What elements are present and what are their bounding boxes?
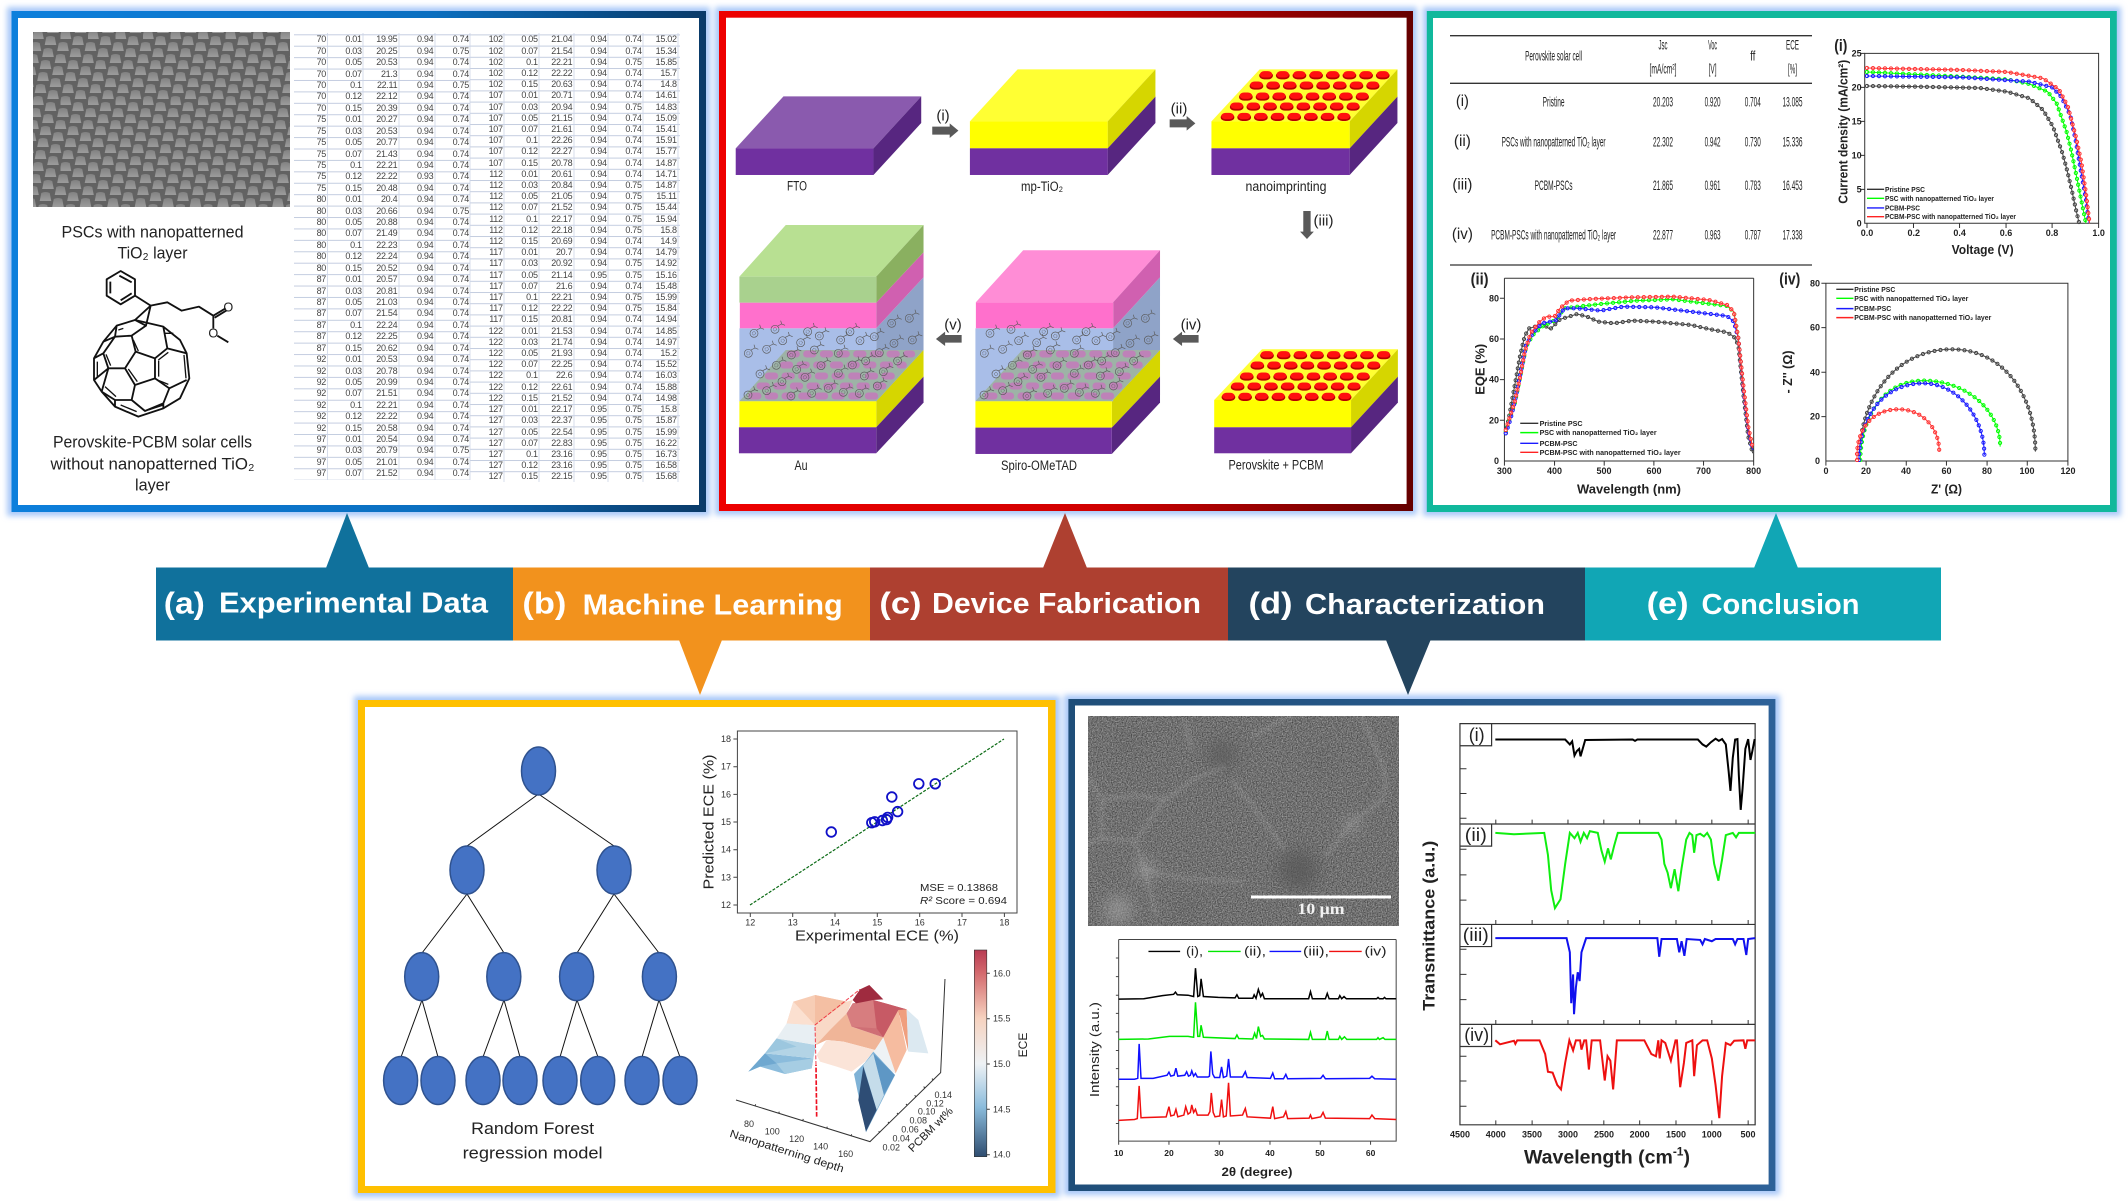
chart: FTIR transmittance spectra: -1	[1673, 1144, 1684, 1158]
chart: EQE spectra: EQE (%)	[1472, 344, 1488, 395]
panel: machine learning	[358, 700, 1056, 1193]
table: experimental data values: 0.94 0.94 0.94 0.94 0.94 0.94 0.94 0.94 0.94 0.94 0.94 0.94 0.93 0.94 0.94 0.94 0.94 0.94 0.94 0.94 0.94 0.94 0.94 0.94 0.94 0.94 0.94 0.94 0.94 0.94 0.94 0.94 0.94 0.94 0.94 0.94 0.94 0.94 0.94	[417, 34, 433, 478]
chart: predicted vs experimental ECE: 18	[999, 918, 1009, 928]
chart: FTIR transmittance spectra: Transmittance (a.u.)	[1420, 841, 1438, 1011]
chart: 3D ECE response surface: 120	[789, 1134, 804, 1144]
panel: device fabrication	[719, 11, 1413, 511]
chart: predicted vs experimental ECE: 16	[721, 789, 731, 799]
banner: characterization: Characterization	[1305, 589, 1545, 621]
step labels: (iv)	[1181, 316, 1201, 334]
chart: EQE spectra: 700	[1696, 466, 1711, 476]
chart: EQE spectra: 80	[1489, 293, 1499, 303]
scale bar: 10 micrometres	[1251, 896, 1391, 918]
chart: EQE spectra: PSC with nanopatterned TiO₂ layer	[1540, 428, 1657, 437]
chart: FTIR transmittance spectra: (ii)	[1465, 825, 1487, 845]
chart: J-V curves: 0.0	[1861, 228, 1873, 238]
legend: ECE colorbar: 14.5	[993, 1104, 1011, 1114]
block: nanoimprinting	[1211, 69, 1397, 175]
chart: 3D ECE response surface: 0.08	[910, 1115, 927, 1125]
chart: predicted vs experimental ECE: 13	[721, 872, 731, 882]
chart: EQE spectra: PCBM-PSC	[1540, 439, 1578, 448]
table: device performance: 0.787	[1745, 227, 1761, 243]
banner: device fabrication: Device Fabrication	[932, 588, 1201, 620]
chart: Nyquist plot: 0	[1823, 466, 1829, 476]
block: mp-TiO2	[970, 69, 1155, 175]
table: device performance: Jsc	[1658, 36, 1668, 52]
text: random forest regression model: Random Forest	[471, 1119, 594, 1138]
text: PSCs with nanopatterned TiO2 layer: TiO₂ layer	[118, 244, 188, 262]
banner: machine learning	[513, 568, 870, 640]
table: device performance: 0.783	[1745, 177, 1761, 193]
chart: FTIR transmittance spectra: 4500	[1450, 1130, 1470, 1140]
table: device performance: ECE	[1786, 36, 1799, 52]
table: device performance: 0.730	[1745, 133, 1761, 149]
chart: FTIR transmittance spectra: 1500	[1666, 1130, 1686, 1140]
chart: 3D ECE response surface: PCBM wt%	[906, 1105, 956, 1155]
arrow: step iii	[1300, 211, 1314, 239]
banner: characterization	[1228, 568, 1585, 640]
table: experimental data values: 0.74 0.74 0.75 0.74 0.74 0.74 0.75 0.74 0.74 0.74 0.74 0.74 0.74 0.75 0.75 0.75 0.75 0.75 0.74 0.74 0.75 0.75 0.74 0.75 0.75 0.74 0.74 0.74 0.74 0.74 0.74 0.74 0.74 0.75 0.75 0.75 0.75 0.75 0.75 0.75	[625, 34, 642, 481]
block: perovskite and PCBM	[1214, 349, 1398, 453]
text: Perovskite-PCBM solar cells without nanopatterned TiO2 layer: layer	[135, 476, 170, 494]
arrow: step ii	[1170, 116, 1195, 131]
banner arrow: experimental data up	[326, 513, 369, 568]
chart: predicted vs experimental ECE: 15	[872, 918, 882, 928]
banner: conclusion: (e)	[1647, 586, 1689, 620]
chart: XRD patterns: (ii),	[1244, 944, 1266, 958]
layer labels	[787, 178, 1326, 473]
table: experimental data values: 0.74 0.75 0.74 0.74 0.75 0.74 0.74 0.74 0.74 0.74 0.74 0.74 0.74 0.74 0.74 0.75 0.74 0.74 0.74 0.74 0.74 0.74 0.74 0.74 0.74 0.74 0.74 0.74 0.74 0.74 0.74 0.74 0.74 0.74 0.74 0.74 0.75 0.74 0.74	[453, 34, 469, 478]
table: device performance	[1450, 36, 1812, 265]
chart: XRD patterns: Intensity (a.u.)	[1088, 1002, 1102, 1097]
table: device performance: 22.877	[1653, 227, 1673, 243]
table: experimental data values: 70 70 70 70 70 70 70 75 75 75 75 75 75 75 80 80 80 80 80 80 80 87 87 87 87 87 87 87 92 92 92 92 92 92 92 97 97 97 97	[317, 34, 326, 478]
table: device performance: PCBM-PSCs with nanopatterned TiO₂ layer	[1491, 227, 1616, 243]
chart: 3D ECE response surface: 0.04	[893, 1133, 910, 1143]
banner arrow: conclusion up	[1754, 513, 1798, 568]
table: device performance: 0.942	[1705, 133, 1721, 149]
table: device performance: 0.920	[1705, 93, 1721, 109]
chart: XRD patterns: (iii),	[1303, 944, 1329, 958]
banner: device fabrication: (c)	[879, 586, 921, 620]
banner: experimental data: (a)	[164, 586, 205, 620]
chart: 3D ECE response surface: 140	[813, 1142, 828, 1152]
chart: EQE spectra: 800	[1746, 466, 1761, 476]
layer labels: Perovskite + PCBM	[1228, 458, 1324, 472]
chart: J-V curves: (i)	[1834, 36, 1847, 55]
chart: FTIR transmittance spectra: (iv)	[1464, 1025, 1489, 1045]
chart: EQE spectra: 500	[1596, 466, 1612, 476]
chart: EQE spectra	[1471, 270, 1761, 496]
chart: EQE spectra: 600	[1646, 466, 1662, 476]
chart: 3D ECE response surface: 0.10	[918, 1106, 935, 1116]
table: device performance: [V]	[1709, 60, 1717, 76]
table: device performance: (iii)	[1452, 176, 1472, 194]
block: Spiro-OMeTAD stack	[975, 250, 1160, 454]
icon: PCBM fullerene molecule: O	[208, 326, 218, 340]
chart: FTIR transmittance spectra: (i)	[1469, 725, 1485, 745]
chart: FTIR transmittance spectra: Wavelength (cm	[1524, 1146, 1673, 1168]
panel: characterization	[1068, 699, 1775, 1191]
chart: J-V curves: 0.6	[2000, 228, 2012, 238]
table: experimental data values: 0.94 0.94 0.94 0.94 0.94 0.94 0.94 0.94 0.94 0.94 0.94 0.94 0.94 0.94 0.94 0.94 0.94 0.94 0.94 0.94 0.94 0.95 0.94 0.94 0.94 0.94 0.94 0.94 0.94 0.94 0.94 0.94 0.94 0.95 0.95 0.95 0.95 0.95 0.95 0.95	[590, 34, 607, 481]
banner: experimental data	[156, 568, 513, 640]
table: device performance: 20.203	[1653, 93, 1673, 109]
legend: ECE colorbar: 15.0	[993, 1059, 1011, 1069]
chart: 3D ECE response surface: 80	[744, 1119, 754, 1129]
image: SEM film micrograph	[1088, 715, 1399, 926]
chart: XRD patterns: 30	[1214, 1148, 1224, 1158]
text: Perovskite-PCBM solar cells without nanopatterned TiO2 layer: Perovskite-PCBM solar cells	[53, 432, 252, 452]
banner: machine learning: (b)	[522, 586, 566, 620]
chart: 3D ECE response surface: 0.14	[935, 1090, 952, 1100]
table: experimental data values: 0.05 0.07 0.1 0.12 0.15 0.01 0.03 0.05 0.07 0.1 0.12 0.15 0.01 0.03 0.05 0.07 0.1 0.12 0.15 0.01 0.03 0.05 0.07 0.1 0.12 0.15 0.01 0.03 0.05 0.07 0.1 0.12 0.15 0.01 0.03 0.05 0.07 0.1 0.12 0.15	[521, 34, 538, 481]
banner arrow: device fabrication up	[1043, 513, 1087, 568]
table: device performance: 0.963	[1705, 227, 1721, 243]
table: device performance: 22.302	[1653, 133, 1673, 149]
chart: J-V curves: Pristine PSC	[1885, 185, 1926, 194]
layer labels: mp-TiO₂	[1021, 179, 1063, 194]
chart: Nyquist plot: Z' (Ω)	[1931, 482, 1962, 496]
chart: J-V curves	[1834, 36, 2105, 257]
table: device performance: PSCs with nanopatterned TiO₂ layer	[1502, 133, 1606, 149]
table: experimental data values: 102 102 102 102 102 107 107 107 107 107 107 107 112 112 112 112 112 112 112 117 117 117 117 117 117 117 122 122 122 122 122 122 122 127 127 127 127 127 127 127	[489, 34, 503, 481]
table: device performance: (i)	[1456, 93, 1469, 110]
banner arrow: characterization down	[1386, 640, 1431, 695]
legend: ECE colorbar	[974, 950, 1030, 1160]
chart: Nyquist plot: 120	[2060, 466, 2076, 476]
table: device performance: 17.338	[1782, 227, 1803, 243]
arrow: step iv	[1173, 332, 1199, 346]
chart: XRD patterns: 10	[1114, 1148, 1124, 1158]
chart: XRD patterns: (iv)	[1364, 944, 1386, 958]
table: device performance: 0.961	[1705, 177, 1721, 193]
banner: characterization: (d)	[1248, 586, 1292, 620]
text: PSCs with nanopatterned TiO2 layer: PSCs with nanopatterned	[62, 222, 244, 242]
chart: J-V curves: PCBM-PSC	[1885, 204, 1920, 212]
text: Perovskite-PCBM solar cells without nanopatterned TiO2 layer	[50, 432, 255, 494]
block: FTO	[736, 96, 921, 175]
table: experimental data values: 15.02 15.34 15.85 15.7 14.8 14.61 14.83 15.09 15.41 15.91 15.77 14.87 14.71 14.87 15.11 15.44 15.94 15.8 14.9 14.79 14.92 15.16 15.48 15.99 15.84 14.94 14.85 14.97 15.2 15.52 16.03 15.88 14.98 15.8 15.87 15.99 16.22 16.73 16.58 15.68	[656, 34, 677, 481]
banner: experimental data: Experimental Data	[219, 588, 489, 620]
chart: XRD patterns: 50	[1315, 1148, 1325, 1158]
chart: Nyquist plot: PCBM-PSC with nanopatterned TiO₂ layer	[1854, 313, 1991, 322]
chart: EQE spectra: PCBM-PSC with nanopatterned TiO₂ layer	[1540, 448, 1681, 457]
chart: J-V curves: 0	[1857, 218, 1862, 228]
chart: predicted vs experimental ECE: 16	[915, 918, 925, 928]
chart: FTIR transmittance spectra: 2500	[1594, 1130, 1614, 1140]
panel: conclusion results	[1427, 11, 2117, 512]
chart: J-V curves: Current density (mA/cm²)	[1836, 60, 1850, 204]
table: experimental data values: 19.95 20.25 20.53 21.3 22.11 22.12 20.39 20.27 20.53 20.77 21.43 22.21 22.22 20.48 20.4 20.66 20.88 21.49 22.23 22.24 20.52 20.57 20.81 21.03 21.54 22.24 22.25 20.62 20.53 20.78 20.99 21.51 22.21 22.22 20.58 20.54 20.79 21.01 21.52	[376, 34, 397, 478]
table: experimental data values: 0.01 0.03 0.05 0.07 0.1 0.12 0.15 0.01 0.03 0.05 0.07 0.1 0.12 0.15 0.01 0.03 0.05 0.07 0.1 0.12 0.15 0.01 0.03 0.05 0.07 0.1 0.12 0.15 0.01 0.03 0.05 0.07 0.1 0.12 0.15 0.01 0.03 0.05 0.07	[345, 34, 362, 478]
chart: FTIR transmittance spectra: )	[1683, 1146, 1690, 1168]
arrow: step v	[936, 332, 962, 346]
chart: 3D ECE response surface: 160	[838, 1149, 853, 1159]
chart: Nyquist plot: 60	[1941, 466, 1952, 476]
table: device performance: 16.453	[1782, 177, 1803, 193]
chart: J-V curves: 25	[1852, 48, 1862, 58]
chart: FTIR transmittance spectra: (iii)	[1463, 925, 1489, 945]
chart: 3D ECE response surface: 0.02	[883, 1142, 900, 1152]
chart: J-V curves: PCBM-PSC with nanopatterned TiO₂ layer	[1885, 212, 2016, 221]
table: device performance: (iv)	[1452, 226, 1473, 243]
chart: FTIR transmittance spectra: 4000	[1486, 1130, 1506, 1140]
table: device performance: (ii)	[1454, 133, 1471, 150]
chart: XRD patterns: 60	[1366, 1148, 1376, 1158]
legend: ECE colorbar: 16.0	[993, 968, 1011, 978]
step labels: (ii)	[1171, 100, 1187, 118]
chart: 3D ECE response surface: 0.12	[926, 1098, 944, 1108]
table: experimental data values: 21.04 21.54 22.21 22.22 20.63 20.71 20.94 21.15 21.61 22.26 22.27 20.78 20.61 20.84 21.05 21.52 22.17 22.18 20.69 20.7 20.92 21.14 21.6 22.21 22.22 20.81 21.53 21.74 21.93 22.25 22.6 22.61 21.52 22.17 22.37 22.54 22.83 23.16 23.16 22.15	[551, 34, 572, 481]
chart: predicted vs experimental ECE: 18	[721, 734, 731, 744]
chart: J-V curves: 5	[1857, 184, 1862, 194]
text: PSCs with nanopatterned TiO2 layer	[62, 222, 244, 262]
chart: predicted vs experimental ECE: Predicted ECE (%)	[700, 754, 718, 890]
chart: Nyquist plot: PSC with nanopatterned TiO₂ layer	[1854, 294, 1968, 303]
chart: FTIR transmittance spectra: 1000	[1702, 1130, 1722, 1140]
chart: Nyquist plot: 40	[1901, 466, 1911, 476]
table: device performance: Voc	[1708, 36, 1717, 52]
chart: EQE spectra: 300	[1497, 466, 1512, 476]
chart: Nyquist plot: 20	[1810, 412, 1820, 422]
chart: J-V curves: 20	[1852, 82, 1862, 92]
chart: J-V curves: 0.2	[1908, 228, 1920, 238]
chart: Nyquist plot: 40	[1810, 367, 1820, 377]
chart: predicted vs experimental ECE	[700, 731, 1017, 944]
chart: EQE spectra: 40	[1489, 375, 1499, 385]
legend: ECE colorbar: ECE	[1016, 1033, 1030, 1057]
chart: predicted vs experimental ECE: 17	[721, 762, 731, 772]
chart: EQE spectra: Pristine PSC	[1540, 419, 1583, 428]
table: experimental data values	[294, 33, 684, 485]
chart: XRD patterns	[1088, 939, 1396, 1179]
table: device performance: ff	[1750, 48, 1755, 64]
table: device performance: 13.085	[1782, 93, 1803, 109]
banner: workflow sections	[156, 513, 1941, 695]
chart: XRD patterns: 40	[1265, 1148, 1275, 1158]
banner: conclusion	[1585, 568, 1941, 640]
chart: predicted vs experimental ECE: 13	[788, 918, 798, 928]
banner: machine learning: Machine Learning	[583, 590, 843, 622]
chart: FTIR transmittance spectra: 3000	[1558, 1130, 1578, 1140]
banner: device fabrication	[870, 568, 1228, 640]
chart: Nyquist plot: 80	[1810, 278, 1820, 288]
step labels: (v)	[944, 316, 962, 334]
diagram: fabrication layer stacks	[736, 69, 1398, 454]
step labels: (i)	[936, 108, 950, 124]
legend: ECE colorbar: 15.5	[993, 1014, 1011, 1024]
chart: Nyquist plot	[1779, 270, 2076, 496]
table: device performance: [%]	[1788, 60, 1797, 76]
chart: EQE spectra: 0	[1494, 456, 1499, 466]
text: Perovskite-PCBM solar cells without nanopatterned TiO2 layer: without nanopatterned TiO₂	[50, 454, 255, 474]
chart: J-V curves: 0.4	[1953, 228, 1966, 238]
chart: Nyquist plot: 0	[1815, 456, 1820, 466]
text: random forest regression model	[463, 1119, 603, 1162]
chart: EQE spectra: 60	[1489, 334, 1499, 344]
chart: EQE spectra: 400	[1547, 466, 1562, 476]
chart: J-V curves: PSC with nanopatterned TiO₂ layer	[1885, 194, 1994, 203]
chart: J-V curves: 1.0	[2092, 228, 2105, 238]
arrow: step i	[932, 123, 958, 138]
chart: predicted vs experimental ECE: 12	[721, 900, 731, 910]
chart: predicted vs experimental ECE: R² Score = 0.694	[920, 895, 1007, 907]
chart: J-V curves: 10	[1852, 150, 1862, 160]
chart: J-V curves: 0.8	[2046, 228, 2058, 238]
table: device performance: Pristine	[1543, 93, 1565, 109]
step labels	[936, 100, 1334, 334]
step labels: (iii)	[1314, 212, 1334, 230]
chart: EQE spectra: Wavelength (nm)	[1577, 482, 1681, 496]
active layer: Au stack perovskite and PCBM	[744, 310, 922, 400]
chart: predicted vs experimental ECE: Experimental ECE (%)	[795, 928, 959, 944]
table: device performance: PCBM-PSCs	[1535, 177, 1573, 193]
diagram: random forest tree	[384, 747, 697, 1104]
layer labels: Au	[794, 458, 808, 473]
chart: J-V curves: 15	[1852, 116, 1862, 126]
chart: J-V curves: Voltage (V)	[1952, 242, 2014, 257]
text: random forest regression model: regression model	[463, 1144, 603, 1162]
table: device performance: 21.865	[1653, 177, 1673, 193]
banner: conclusion: Conclusion	[1702, 589, 1860, 621]
chart: predicted vs experimental ECE: MSE = 0.13868	[920, 882, 998, 894]
chart: Nyquist plot: 60	[1810, 323, 1820, 333]
icon: PCBM fullerene molecule	[94, 271, 233, 417]
chart: Nyquist plot: 80	[1982, 466, 1992, 476]
chart: Nyquist plot: - Z'' (Ω)	[1780, 350, 1795, 394]
chart: FTIR transmittance spectra	[1420, 724, 1756, 1168]
table: device performance: 0.704	[1745, 93, 1761, 109]
image: nanopatterned SEM micrograph	[33, 32, 290, 207]
banner arrow: machine learning down	[679, 640, 722, 695]
chart: Nyquist plot: 100	[2019, 466, 2035, 476]
chart: XRD patterns: (i),	[1186, 944, 1203, 958]
chart: XRD patterns: 2θ (degree)	[1222, 1165, 1292, 1179]
chart: 3D ECE response surface	[728, 979, 956, 1175]
layer labels: nanoimprinting	[1246, 179, 1326, 194]
block: Au stack	[739, 225, 924, 453]
chart: Nyquist plot: PCBM-PSC	[1854, 304, 1892, 313]
table: device performance: [mA/cm²]	[1650, 60, 1676, 76]
chart: EQE spectra: 20	[1489, 415, 1499, 425]
chart: XRD patterns: 20	[1164, 1148, 1174, 1158]
chart: Nyquist plot: (iv)	[1779, 270, 1800, 288]
chart: 3D ECE response surface: 100	[765, 1127, 780, 1137]
table: device performance: 15.336	[1782, 133, 1803, 149]
chart: Nyquist plot: Pristine PSC	[1854, 285, 1896, 294]
chart: EQE spectra: (ii)	[1471, 270, 1489, 288]
chart: predicted vs experimental ECE: 14	[721, 845, 731, 855]
active layer: Spiro stack perovskite and PCBM	[980, 310, 1158, 400]
chart: FTIR transmittance spectra: 500	[1740, 1130, 1756, 1140]
layer labels: FTO	[787, 178, 807, 194]
chart: 3D ECE response surface: 0.06	[901, 1124, 919, 1134]
chart: predicted vs experimental ECE: 15	[721, 817, 731, 827]
icon: PCBM fullerene molecule: O	[223, 300, 233, 314]
chart: 3D ECE response surface: Nanopatterning depth	[728, 1128, 845, 1175]
chart: predicted vs experimental ECE: 14	[830, 918, 840, 928]
chart: Nyquist plot: 20	[1861, 466, 1871, 476]
chart: FTIR transmittance spectra: 2000	[1630, 1130, 1650, 1140]
legend: ECE colorbar: 14.0	[993, 1150, 1011, 1160]
chart: predicted vs experimental ECE: 12	[745, 918, 755, 928]
chart: predicted vs experimental ECE: 17	[957, 918, 967, 928]
layer labels: Spiro-OMeTAD	[1001, 458, 1077, 473]
table: device performance: Perovskite solar cell	[1525, 48, 1582, 64]
panel: experimental data	[12, 11, 706, 512]
scale bar: 10 micrometres: 10 μm	[1298, 901, 1345, 918]
chart: FTIR transmittance spectra: 3500	[1522, 1130, 1542, 1140]
